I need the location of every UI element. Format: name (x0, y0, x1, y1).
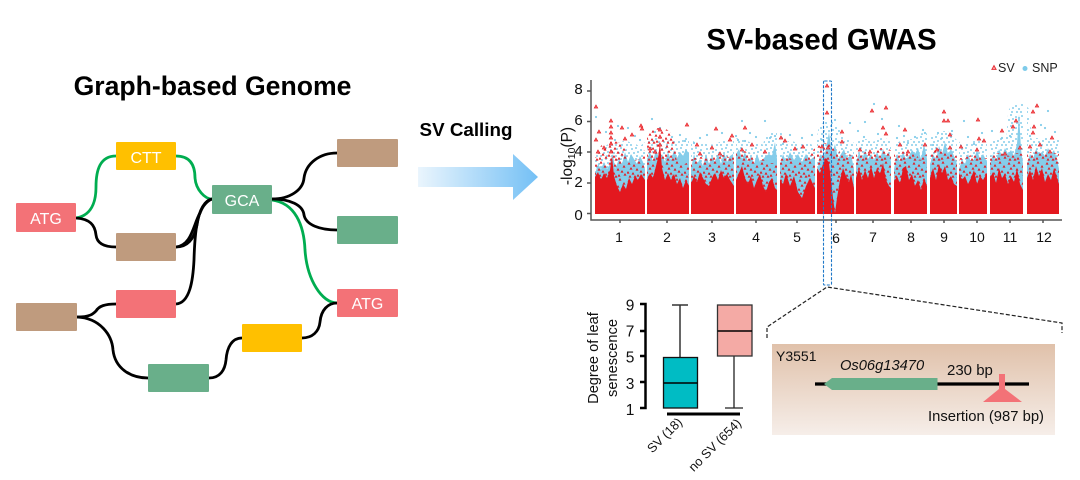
chromosome labels: 1 (615, 229, 623, 245)
box: SV (664, 305, 698, 408)
SV outlier triangles (594, 84, 1054, 155)
black path connectors (76, 153, 337, 378)
chromosome labels (615, 229, 1052, 246)
SNP outlier dots (596, 104, 1055, 145)
green path connectors (76, 156, 337, 303)
chromosome labels: 8 (907, 229, 915, 245)
box plot: no SV (654) (685, 416, 744, 474)
insertion marker (983, 374, 1022, 402)
box: no SV (718, 305, 752, 408)
genomic line (815, 382, 1029, 386)
y tick labels: 3 (626, 376, 634, 393)
chromosome labels: 3 (708, 229, 716, 245)
chromosome labels: 12 (1036, 229, 1052, 245)
chromosome labels: 7 (869, 229, 877, 245)
legend: SV (998, 61, 1015, 75)
gene panel (772, 344, 1055, 435)
y axis tick labels: 0 (574, 207, 583, 224)
y axis title: Degree of leaf (586, 311, 602, 404)
node: green bottom (148, 364, 209, 392)
y tick labels: 1 (626, 402, 634, 419)
chromosome labels: 11 (1003, 229, 1017, 245)
legend (992, 61, 1058, 75)
zoom lines (767, 287, 1062, 338)
y tick labels: 5 (626, 350, 634, 366)
y axis title: (P) (559, 127, 576, 148)
y tick labels: 7 (626, 324, 634, 340)
chromosome labels: 9 (940, 229, 948, 245)
chromosome labels: 5 (793, 229, 801, 245)
y axis tick labels: 6 (574, 112, 583, 129)
node: ATG left (16, 203, 76, 232)
graph genome diagram (16, 139, 398, 392)
label: 230 bp: 230 bp (947, 362, 993, 379)
arrow: SV calling (418, 154, 538, 200)
node: yellow (242, 324, 302, 352)
title: SV-based GWAS: SV-based GWAS (706, 24, 937, 56)
node: GCA (212, 185, 272, 214)
gene arrow (824, 378, 938, 390)
SV red mass (595, 143, 1059, 221)
node: brown left (16, 303, 77, 331)
box plot (586, 298, 752, 474)
node: brown top right (337, 139, 398, 167)
chromosome labels: 6 (832, 230, 840, 246)
node label: GCA: GCA (225, 193, 260, 210)
y axis tick labels: 8 (574, 81, 583, 98)
label: insertion: Insertion (987 bp) (928, 409, 1044, 425)
node label: ATG left: ATG (30, 211, 62, 228)
manhattan plot (559, 80, 1062, 246)
highlight box: chromosome 6 peak (824, 81, 832, 285)
node label: ATG right: ATG (352, 296, 383, 313)
chromosome labels: 10 (969, 229, 985, 245)
y axis tick labels: 2 (574, 174, 583, 191)
node: ATG right (337, 289, 398, 317)
y axis tick labels (574, 81, 583, 224)
y axis title: -log (559, 159, 576, 185)
node: CTT (116, 142, 176, 170)
label: SV Calling: SV Calling (420, 119, 512, 140)
y axis (640, 304, 646, 408)
y tick labels: 9 (626, 298, 634, 314)
legend: SNP (1032, 61, 1058, 75)
y axis and x axis (587, 80, 1062, 223)
SNP blue mass (595, 114, 1059, 217)
node: red middle (116, 290, 176, 318)
box plot: senescence (605, 319, 621, 397)
node: green right (337, 216, 398, 244)
y axis title: 10 (566, 147, 578, 159)
y tick labels (626, 298, 634, 419)
label: Y3551: Y3551 (776, 348, 817, 364)
chromosome labels: 2 (663, 229, 671, 245)
chromosome labels: 4 (752, 229, 760, 245)
x axis bar (667, 412, 740, 416)
title: Graph-based Genome: Graph-based Genome (74, 71, 351, 101)
x labels: SV (18) (644, 415, 685, 456)
gene name: Os06g13470 (840, 358, 925, 374)
node: brown upper (116, 233, 176, 261)
node label: CTT: CTT (130, 150, 162, 167)
y axis tick labels: 4 (574, 143, 583, 160)
